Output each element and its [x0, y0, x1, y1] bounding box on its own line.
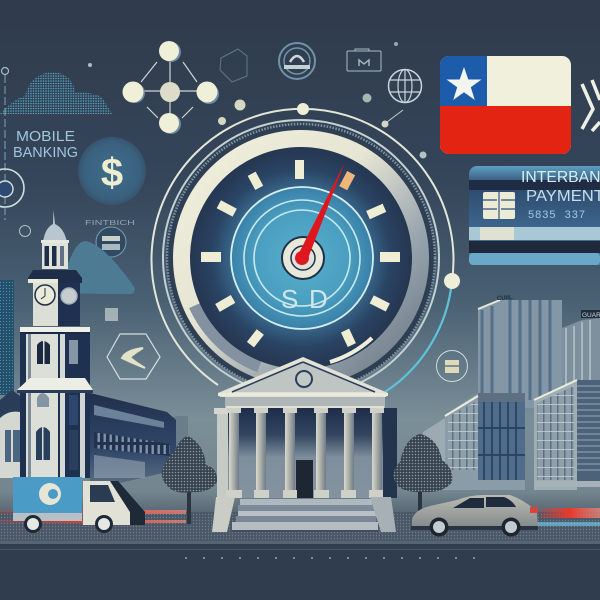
sign: CUIIL: [497, 295, 513, 302]
blue dial: [231, 187, 373, 329]
panel: small dots and connectors: [88, 42, 426, 158]
panel: ground: [0, 512, 600, 545]
lower right highlight: [330, 338, 372, 362]
text: fintech: FINTBICH: [85, 218, 135, 227]
tower lantern and dome: [42, 242, 68, 269]
dial rings: [244, 200, 360, 316]
mag stripe top: [469, 180, 600, 190]
pediment: [218, 357, 388, 397]
lower tower: [20, 332, 90, 478]
icon: delivery truck: [13, 477, 145, 533]
red light trails: [0, 508, 600, 526]
panel: left tech line: [0, 68, 30, 236]
icon: car: [411, 495, 538, 536]
heading: mobile banking: BANKING: [13, 145, 78, 161]
outer thin ring: [151, 109, 453, 385]
column caps: [226, 408, 384, 498]
panel: interbank payment card: PAYMENT: [526, 188, 600, 205]
heading: mobile banking: MOBILE: [16, 129, 75, 145]
panel: far right office block: [534, 380, 600, 490]
entablature: [225, 397, 385, 408]
icon: small outline device: [220, 49, 247, 82]
bank body: [225, 408, 385, 498]
gauge label: [281, 284, 328, 314]
panel: clock tower building: [0, 210, 188, 490]
medallion: [296, 371, 312, 387]
icon: dollar badge: $: [101, 151, 123, 195]
gauge label: S: [281, 284, 298, 314]
right dark pier: [383, 408, 397, 498]
light stripe: [469, 227, 600, 240]
dark face: [190, 147, 412, 369]
segmented steel ring: [163, 120, 439, 396]
icon: dollar badge: [78, 137, 146, 205]
icon: dotted hill: [60, 241, 135, 294]
far gray annex: [166, 416, 188, 462]
bezel: [173, 130, 429, 386]
panel: road: [0, 541, 600, 600]
needle: [298, 162, 345, 261]
icon: square glyph: [105, 308, 118, 321]
door: [296, 460, 313, 498]
icon: chilean flag: [440, 56, 571, 154]
panel: bank building: [212, 357, 397, 532]
panel: right towers: [478, 295, 600, 408]
left outer pier: [217, 408, 228, 498]
panel: network diagram: [122, 41, 219, 134]
lower left bezel shading: [196, 305, 260, 365]
dark knurled band: [167, 124, 435, 392]
icon: right tree: [393, 434, 452, 521]
icon: briefcase: [347, 49, 381, 71]
chip: [483, 192, 515, 219]
card number: 5835 337: [528, 209, 586, 221]
tower windows: [37, 341, 50, 364]
icon: chevrons: [582, 80, 600, 131]
icon: circular top icon: [279, 43, 315, 79]
left wing: [0, 390, 20, 478]
dark stripe: [469, 241, 600, 253]
clock stage: [33, 283, 80, 326]
cyan lower arc: [385, 281, 452, 392]
tick marks: [201, 160, 400, 347]
gauge: [151, 103, 460, 396]
ring nodes: [297, 103, 309, 115]
heading: mobile banking: [13, 129, 78, 161]
icon: globe: [388, 69, 422, 103]
icon: blue grid skyscraper: [0, 280, 14, 395]
hub: [282, 237, 324, 279]
upper cornice: [20, 327, 90, 332]
navy wing: [90, 393, 176, 490]
icon: dotted cloud: [0, 72, 112, 114]
stairs: [240, 499, 372, 505]
mid cornice: [17, 378, 93, 390]
gauge label: D: [309, 284, 328, 314]
icon: fintech badge: [96, 227, 126, 257]
icon: left tree: [162, 436, 217, 524]
columns: [229, 410, 382, 496]
panel: mid office block: [423, 393, 525, 490]
icon: circled bank glyph: [436, 350, 468, 382]
icon: hexagon arrow: [107, 334, 160, 379]
panel: interbank payment card: [469, 166, 600, 265]
